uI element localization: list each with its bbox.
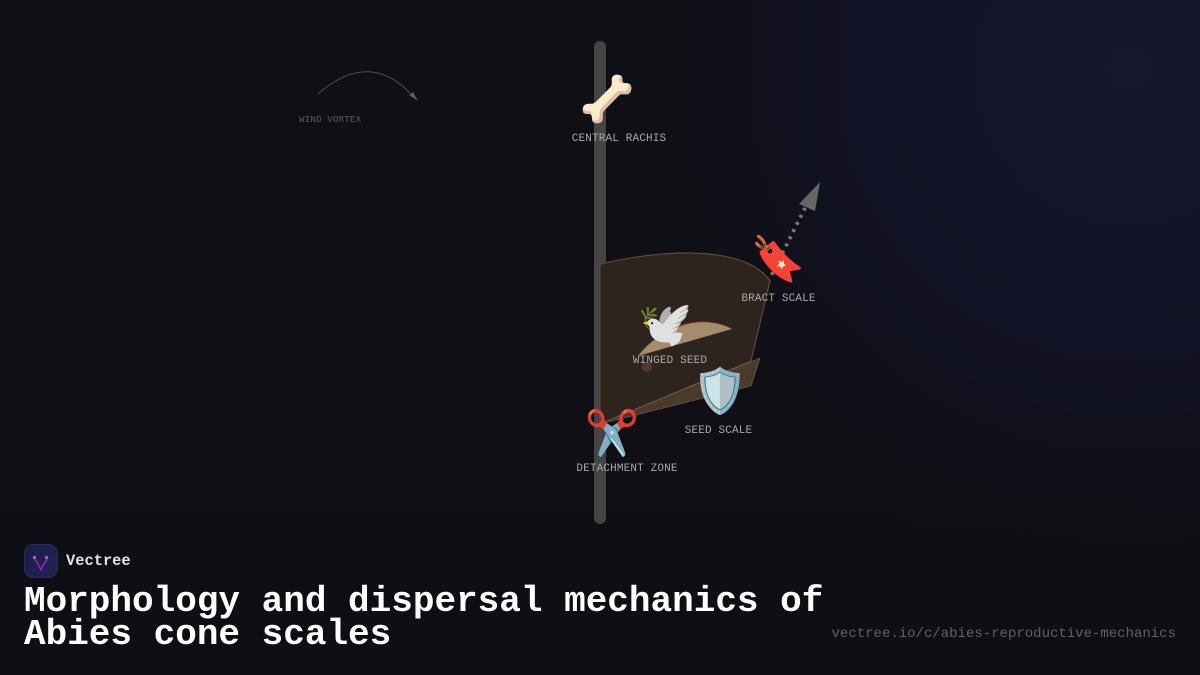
label: seed scale: SEED SCALE (685, 425, 753, 437)
label: winged seed: WINGED SEED (633, 355, 707, 367)
dispersal arrow (768, 182, 820, 282)
icon: dove: 🕊️ (638, 298, 692, 350)
seed scale (600, 358, 760, 424)
title: Abies cone scales (24, 614, 391, 655)
source url: vectree.io/c/abies-reproductive-mechanics (832, 626, 1176, 642)
central rachis bar (594, 41, 606, 524)
title: Morphology and dispersal mechanics of (24, 581, 823, 622)
icon: shield: 🛡️ (693, 365, 747, 417)
label: wind vortex: WIND VORTEX (299, 114, 362, 125)
logo (24, 544, 58, 578)
brand name: Vectree (66, 552, 131, 570)
winged seed (638, 322, 732, 372)
label: bract scale: BRACT SCALE (741, 293, 816, 305)
label: central rachis: CENTRAL RACHIS (572, 133, 667, 145)
wind vortex arrow (318, 72, 418, 101)
icon: bone: 🦴 (580, 72, 635, 125)
icon: scissors: ✂️ (585, 406, 639, 459)
icon: bookmark: 🔖 (751, 233, 805, 285)
cone scale body (600, 253, 770, 424)
label: detachment zone: DETACHMENT ZONE (576, 463, 678, 475)
